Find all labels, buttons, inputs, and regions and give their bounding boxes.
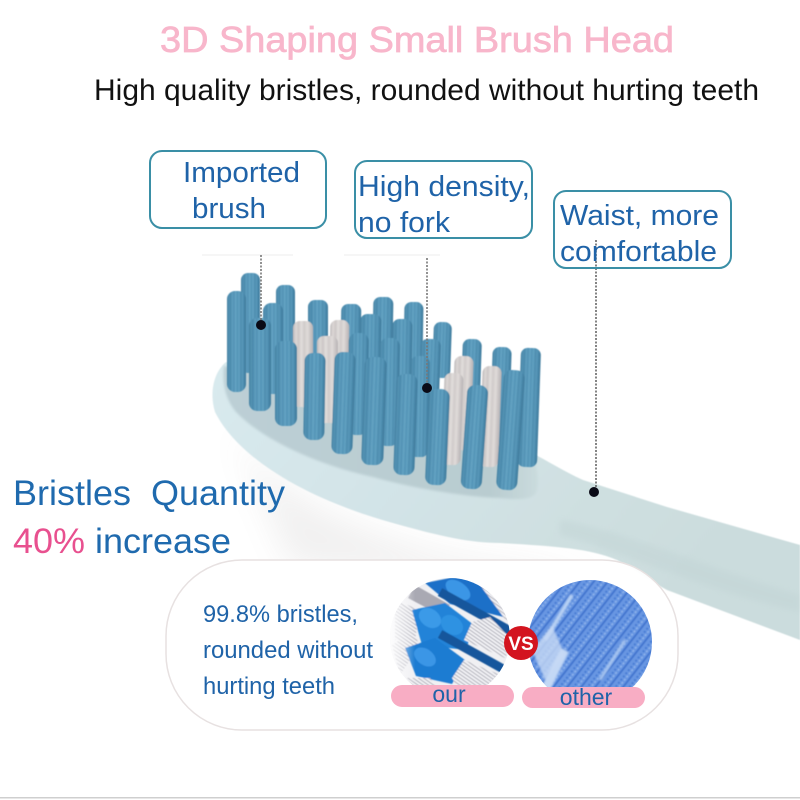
- title: 3D Shaping Small Brush Head: [160, 19, 674, 60]
- label pill: our: [391, 681, 514, 707]
- brush plate: [224, 366, 538, 499]
- head shadow: [225, 410, 600, 585]
- VS badge: [504, 626, 538, 660]
- bristle tufts: [227, 273, 541, 491]
- callout: high density: no fork: [358, 207, 451, 239]
- callout: imported brush: brush: [192, 193, 266, 225]
- handle shading: [560, 520, 800, 612]
- label pill: our: our: [432, 681, 466, 707]
- leader: waist: [589, 240, 599, 497]
- callout: imported brush: [150, 151, 326, 228]
- callout: high density: High density,: [358, 171, 530, 203]
- panel text: 99.8% bristles,: [203, 601, 358, 628]
- bristle quantity heading: Bristles Quantity: [13, 474, 286, 513]
- callout: waist: comfortable: [560, 236, 717, 268]
- panel text: hurting teeth: [203, 673, 335, 700]
- label pill: other: other: [560, 684, 613, 710]
- callout: high density: [355, 161, 532, 239]
- callout: waist: [554, 191, 731, 268]
- panel background: [166, 560, 678, 730]
- callout: imported brush: Imported: [183, 157, 300, 189]
- label pill: other: [522, 684, 645, 710]
- panel text: rounded without: [203, 637, 373, 664]
- toothbrush illustration: [212, 273, 800, 640]
- bristle quantity heading: 40% increase: [13, 522, 231, 561]
- panel text: [203, 601, 373, 700]
- VS badge: VS: [508, 634, 534, 655]
- subtitle: High quality bristles, rounded without hurting teeth: [94, 74, 759, 107]
- leader: imported brush: [256, 255, 266, 330]
- faint guide lines: [202, 254, 440, 256]
- leader: high density: [422, 258, 432, 393]
- image: our bristles: [392, 578, 510, 685]
- bottom edge line: [0, 797, 800, 798]
- panel: comparison: [166, 560, 678, 730]
- callout: waist: Waist, more: [560, 200, 719, 232]
- image: other bristles: [530, 580, 652, 687]
- bristle quantity heading: [13, 474, 286, 561]
- brush head and handle: [212, 362, 800, 640]
